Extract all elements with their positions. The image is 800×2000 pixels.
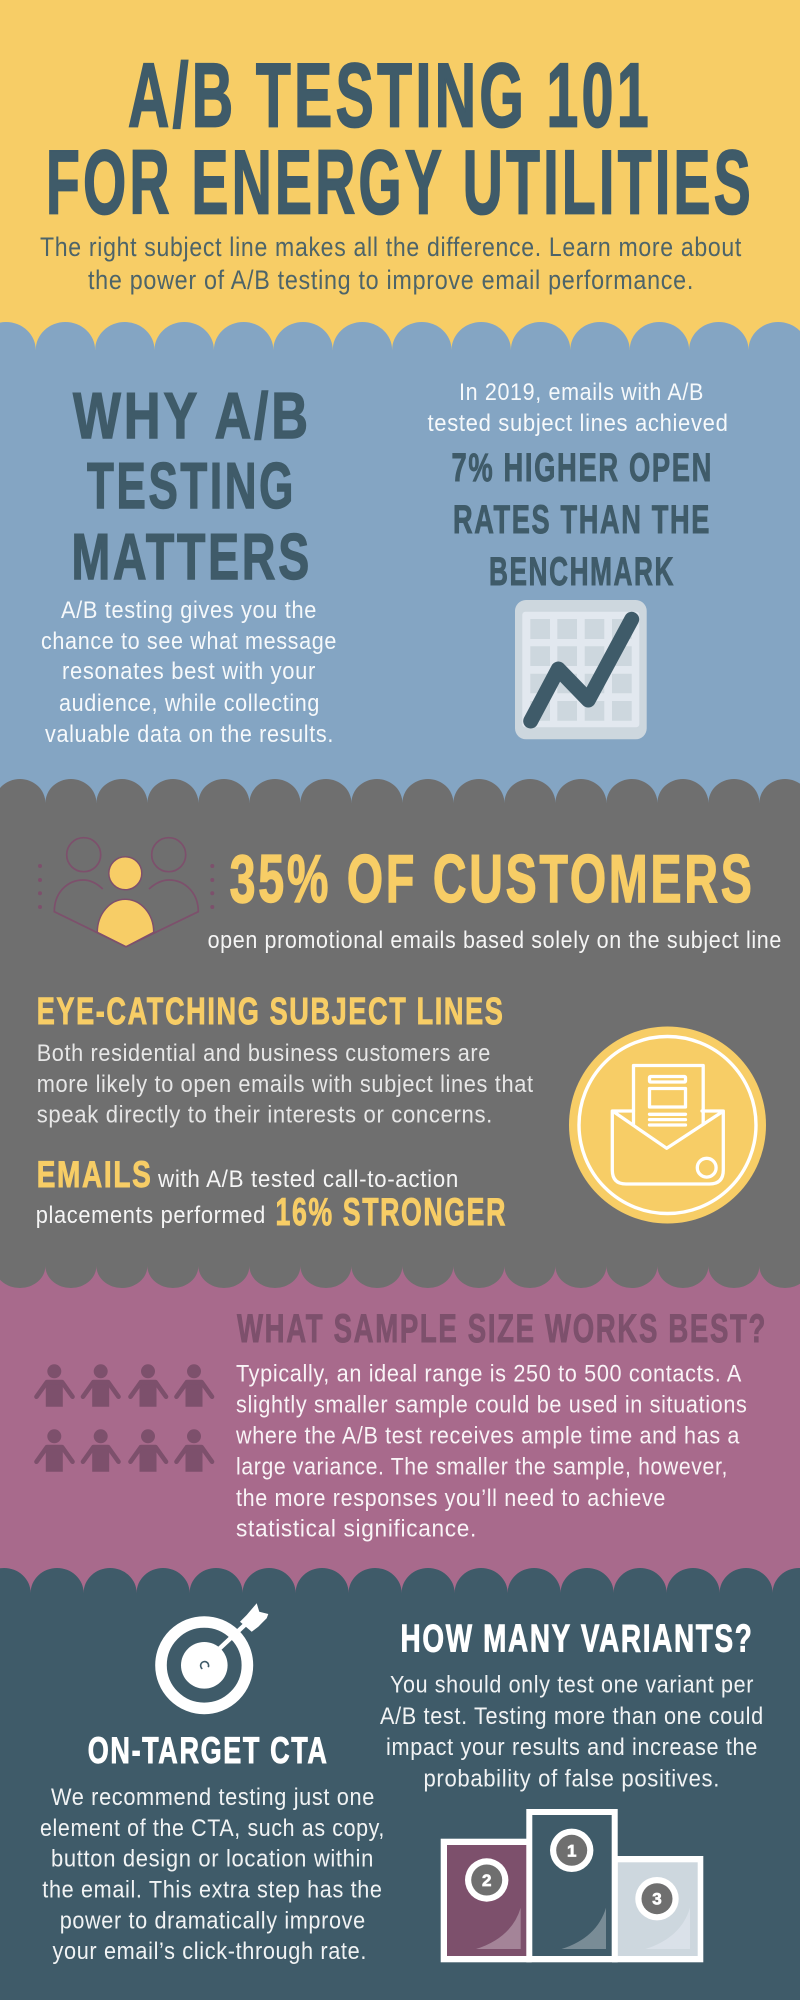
text: CTA body xyxy=(40,1784,385,1965)
text: CTA body: element of the CTA, such as copy, xyxy=(40,1815,385,1842)
title xyxy=(46,46,754,234)
heading: on-target CTA: ON-TARGET CTA xyxy=(88,1730,328,1771)
heading: why A/B testing matters xyxy=(72,379,312,593)
subtitle xyxy=(40,232,742,295)
heading: eye-catching subject lines: EYE-CATCHING SUBJECT LINES xyxy=(37,991,504,1033)
icon: group of people xyxy=(38,838,214,947)
text: why A/B testing body: chance to see what message xyxy=(41,628,337,655)
text: why A/B testing body: valuable data on the results. xyxy=(45,721,334,748)
stat: emails 16% stronger: placements performed xyxy=(36,1202,266,1229)
icon: line chart xyxy=(515,600,647,739)
text: 2019 intro: In 2019, emails with A/B xyxy=(459,379,704,406)
stat: emails 16% stronger xyxy=(36,1154,507,1234)
panel: header xyxy=(0,0,800,360)
text: sample size body: slightly smaller sample could be used in situations xyxy=(236,1392,748,1419)
text: CTA body: button design or location within xyxy=(51,1846,374,1873)
heading: why A/B testing matters: MATTERS xyxy=(72,520,312,593)
text: why A/B testing body: audience, while collecting xyxy=(59,690,320,717)
text: CTA body: We recommend testing just one xyxy=(51,1784,375,1811)
text: variants body: impact your results and increase the xyxy=(386,1734,758,1761)
stat: emails 16% stronger: EMAILS xyxy=(37,1154,153,1195)
text: CTA body: power to dramatically improve xyxy=(60,1908,366,1935)
text: variants body xyxy=(380,1672,764,1793)
heading: why A/B testing matters: TESTING xyxy=(87,449,296,522)
text: CTA body: your email’s click-through rate. xyxy=(52,1938,367,1965)
text: why A/B testing body xyxy=(41,597,337,748)
text: 2019 intro xyxy=(428,379,728,437)
stat: emails 16% stronger: 16% STRONGER xyxy=(276,1191,507,1234)
text: CTA body: the email. This extra step has the xyxy=(42,1877,383,1904)
text: variants body: probability of false positives. xyxy=(424,1766,720,1793)
text: variants body: A/B test. Testing more than one could xyxy=(380,1703,764,1730)
text: eye-catching body xyxy=(37,1040,534,1129)
panel: customers xyxy=(0,779,800,1288)
text: sample size body: the more responses you’ll need to achieve xyxy=(236,1485,666,1512)
text: sample size body: where the A/B test receives ample time and has a xyxy=(235,1423,740,1450)
text: variants body: You should only test one variant per xyxy=(390,1672,754,1699)
stat: emails 16% stronger: with A/B tested call-to-action xyxy=(157,1166,459,1193)
panel: sample size xyxy=(36,1307,767,1543)
heading: why A/B testing matters: WHY A/B xyxy=(73,379,311,452)
icon: podium: 1 xyxy=(567,1841,576,1860)
stat: 7% higher open rates xyxy=(452,446,713,594)
panel: why A/B testing matters xyxy=(0,322,800,820)
icon: podium xyxy=(441,1809,703,1962)
icon: podium: 2 xyxy=(482,1871,491,1890)
text: eye-catching body: speak directly to their interests or concerns. xyxy=(37,1102,493,1129)
subtitle: the power of A/B testing to improve email performance. xyxy=(88,265,694,295)
text: why A/B testing body: A/B testing gives you the xyxy=(61,597,317,624)
text: eye-catching body: Both residential and business customers are xyxy=(37,1040,491,1067)
panel: sample size background xyxy=(0,1240,800,1620)
icon: email envelope badge xyxy=(569,1026,766,1224)
text: 2019 intro: tested subject lines achieved xyxy=(428,410,728,437)
text: sample size body: Typically, an ideal range is 250 to 500 contacts. A xyxy=(236,1361,742,1388)
icon: target with arrow xyxy=(161,1603,268,1708)
text: sample size body: statistical significance. xyxy=(236,1516,477,1543)
text: why A/B testing body: resonates best with your xyxy=(62,658,316,685)
text: sample size body: large variance. The smaller the sample, however, xyxy=(236,1454,728,1481)
icon: podium: 3 xyxy=(652,1890,662,1909)
stat: 7% higher open rates: BENCHMARK xyxy=(489,550,675,594)
panel: CTA and variants xyxy=(0,1568,800,2000)
icon: eight people xyxy=(36,1364,212,1472)
text: sample size body xyxy=(235,1361,748,1543)
text: eye-catching body: more likely to open emails with subject lines that xyxy=(37,1071,534,1098)
